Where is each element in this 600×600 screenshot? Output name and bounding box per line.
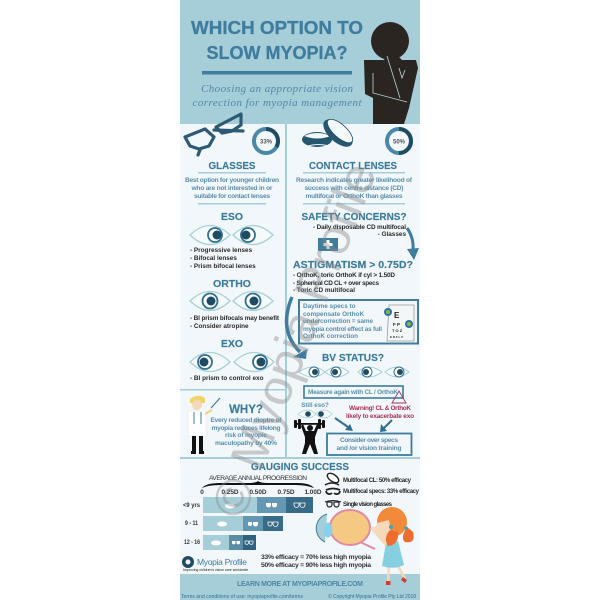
icon: warning triangle <box>392 391 406 403</box>
callout: measure again: Measure again with CL / OrthoK <box>308 389 398 396</box>
icon: contact lenses <box>302 114 357 152</box>
text: why explanation: Every reduced dioptre of <box>210 417 282 424</box>
text: safety options: - Glasses <box>378 231 406 238</box>
callout: daytime specs: OrthoK correction <box>303 333 358 340</box>
callout: consider over specs: Consider over specs <box>340 437 398 444</box>
text: ortho options: - Consider atropine <box>190 323 249 330</box>
icon: eye chart: E <box>394 311 400 320</box>
text: learn more: LEARN MORE AT MYOPIAPROFILE.COM <box>237 581 363 588</box>
text: glasses description: suitable for contact lenses <box>194 193 270 200</box>
text: ortho options: - BI prism bifocals may benefit <box>190 315 280 322</box>
callout: consider over specs: and /or vision training <box>336 445 402 452</box>
text: exo option: - BI prism to control exo <box>190 375 264 382</box>
heading: bv status: BV STATUS? <box>322 352 384 364</box>
icon: eye chart <box>384 305 414 341</box>
heading: gauging success: GAUGING SUCCESS <box>251 461 349 473</box>
icon: thinking person silhouette <box>364 22 418 124</box>
text: glasses description <box>185 177 279 200</box>
text: contact lenses description <box>296 177 413 200</box>
heading: astigmatism: ASTIGMATISM > 0.75D? <box>293 259 413 271</box>
text: efficacy summary: 50% efficacy = 90% less high myopia <box>261 562 371 569</box>
divider: why section top <box>180 389 285 390</box>
heading: exo: EXO <box>221 338 243 350</box>
panel: header <box>180 0 420 124</box>
donut: 33% <box>254 129 278 153</box>
callout: daytime specs: myopia control effect as full <box>303 326 382 333</box>
icon: eye chart: F P <box>393 322 400 327</box>
callout: daytime specs: undercorrection = same <box>303 318 373 325</box>
callout: measure again <box>304 386 403 398</box>
legend: Single vision glasses <box>343 502 393 508</box>
panel: footer <box>180 574 420 600</box>
logo: myopia profile: Myopia Profile <box>197 557 247 567</box>
icon: ortho eyes <box>190 292 273 310</box>
text: why explanation: myopia reduces lifelong <box>212 425 280 432</box>
callout: daytime specs: Daytime specs to <box>303 303 356 310</box>
title: WHICH OPTION TO <box>191 18 363 38</box>
callout: consider over specs <box>327 434 412 455</box>
icon: still eso eyes <box>298 410 332 418</box>
heading: why: WHY? <box>229 404 263 416</box>
panel: contact lenses column <box>287 114 419 455</box>
text: astigmatism options: - Spherical CD CL + over specs <box>293 280 379 287</box>
subtitle: Choosing an appropriate vision <box>201 83 354 95</box>
text: astigmatism options: - Toric CD multifocal <box>293 287 355 294</box>
title <box>191 18 363 63</box>
text: warning: likely to exacerbate exo <box>346 413 414 420</box>
row: 9 to 11: 9 - 11 <box>185 521 199 527</box>
illustration: eye anatomy <box>316 510 375 549</box>
text: contact lenses description: Research indicates greater likelihood of <box>296 177 413 184</box>
divider: gauging section top <box>180 457 420 459</box>
text: contact lenses description: multifocal or OrthoK than glasses <box>306 193 403 200</box>
chart: average annual progression: 0.25D <box>221 489 239 496</box>
legend: Multifocal CL: 50% efficacy <box>343 478 412 484</box>
heading: contact lenses: CONTACT LENSES <box>309 160 397 172</box>
heading: safety concerns: SAFETY CONCERNS? <box>302 211 406 223</box>
icon: eye chart: E D F L Z <box>390 335 403 339</box>
icon: weightlifter <box>294 419 325 454</box>
panel: why <box>188 396 282 454</box>
text: why explanation: risk of myopic <box>225 432 267 439</box>
text: why explanation: maculopathy by 40% <box>215 440 277 447</box>
arrow: still eso to consider <box>335 418 353 431</box>
donut: 50% <box>387 129 411 153</box>
chart: average annual progression: AVERAGE ANNUAL PROGRESSION <box>209 475 307 482</box>
text: safety options <box>313 224 406 238</box>
heading: ortho: ORTHO <box>213 278 251 290</box>
title: SLOW MYOPIA? <box>206 43 348 63</box>
icon: bv status eyes <box>299 367 409 377</box>
title underline <box>202 71 352 74</box>
icon: doctor with pointer <box>188 396 220 454</box>
subtitle: correction for myopia management <box>192 97 362 109</box>
row: 12 to 16: 12 - 16 <box>184 540 201 546</box>
text: eso options: - Progressive lenses <box>190 247 253 254</box>
arrow: astigmatism to bv status <box>287 297 307 359</box>
text: eso options: - Bifocal lenses <box>190 255 237 262</box>
row: under 9 years: <9 yrs <box>183 503 201 509</box>
text: why explanation <box>210 417 282 447</box>
text: copyright: © Copyright Myopia Profile Pty Ltd 2018 <box>328 593 416 600</box>
panel: glasses column <box>185 114 280 382</box>
text: warning: Warning! CL & OrthoK <box>349 405 411 412</box>
text: eso options <box>190 247 256 270</box>
logo: myopia profile: Improving children's vision care worldwide <box>183 568 248 572</box>
text: efficacy summary <box>261 554 371 569</box>
panel: page body background <box>180 0 420 600</box>
chart: average annual progression: 0.50D <box>249 489 267 496</box>
text: warning <box>346 405 414 420</box>
text: contact lenses description: success with centre distance (CD) <box>304 185 404 192</box>
donut: 33%: 33% <box>260 140 273 146</box>
text: astigmatism options <box>293 272 395 294</box>
chart: average annual progression: 1.00D <box>304 489 322 496</box>
chart: average annual progression: 0 <box>200 489 204 496</box>
heading: eso: ESO <box>221 211 243 223</box>
icon: medical kit <box>318 238 338 251</box>
callout: daytime specs: compensate OrthoK <box>303 311 364 318</box>
heading: glasses: GLASSES <box>208 160 256 172</box>
text: ortho options <box>190 315 280 330</box>
text: eso options: - Prism bifocal lenses <box>190 263 256 270</box>
text: terms: Terms and conditions of use: myopiaprofile.com/terms <box>181 594 304 600</box>
arrow: warning to consider <box>380 420 392 432</box>
donut: 50%: 50% <box>393 140 406 146</box>
text: astigmatism options: - OrthoK, toric OrthoK if cyl > 1.50D <box>293 272 395 279</box>
panel: gauging success <box>182 461 420 572</box>
chart: average annual progression <box>183 475 322 550</box>
illustration: girl <box>370 507 414 585</box>
icon: eye chart: T O Z <box>392 328 403 333</box>
arrow: safety to astigmatism <box>407 228 419 260</box>
legend <box>325 471 420 508</box>
icon: glasses <box>185 114 243 155</box>
chart: average annual progression: 0.75D <box>277 489 295 496</box>
text: safety options: - Daily disposable CD multifocal <box>313 224 406 231</box>
legend: Multifocal specs: 33% efficacy <box>343 489 420 495</box>
text: still eso: Still eso? <box>301 402 329 409</box>
callout: daytime specs <box>299 300 418 344</box>
text: efficacy summary: 33% efficacy = 70% less high myopia <box>261 554 371 561</box>
divider: vertical column split <box>285 124 287 458</box>
logo: myopia profile <box>182 556 248 572</box>
subtitle <box>192 83 362 109</box>
text: glasses description: who are not interested in or <box>190 185 273 192</box>
icon: exo eyes <box>190 352 274 372</box>
text: glasses description: Best option for younger children <box>185 177 279 184</box>
watermark: © Myopia Profile <box>201 155 387 525</box>
icon: eso eyes <box>190 226 273 244</box>
